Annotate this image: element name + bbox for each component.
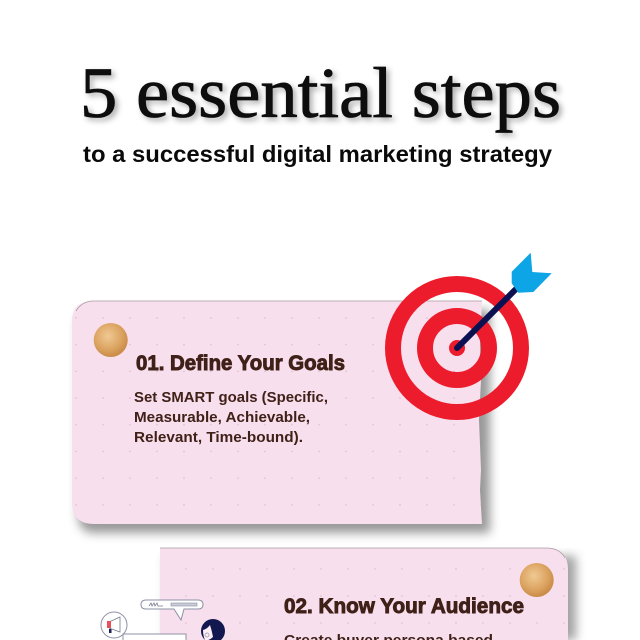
heading: step 2: 02. Know Your Audience — [284, 595, 524, 618]
heading: step 1: 01. Define Your Goals — [136, 352, 345, 375]
text block: step 1 — [134, 390, 328, 446]
title: 5 essential steps — [80, 53, 561, 133]
text block: step 1: Measurable, Achievable, — [134, 410, 310, 426]
icon: gold pin — [520, 563, 554, 597]
subtitle: to a successful digital marketing strategy — [83, 141, 552, 167]
icon: megaphone — [101, 612, 127, 638]
text block: step 1: Set SMART goals (Specific, — [134, 390, 328, 406]
panel: step 2 know your audience — [160, 548, 576, 640]
icon: speech bubble — [141, 600, 203, 620]
icon: person head — [201, 619, 225, 640]
lower message box — [123, 634, 186, 640]
icon: gold pin — [94, 323, 128, 357]
text block: step 1: Relevant, Time-bound). — [134, 430, 303, 446]
panel: step 1 define your goals — [72, 301, 490, 533]
icon: target with dart — [393, 253, 552, 412]
